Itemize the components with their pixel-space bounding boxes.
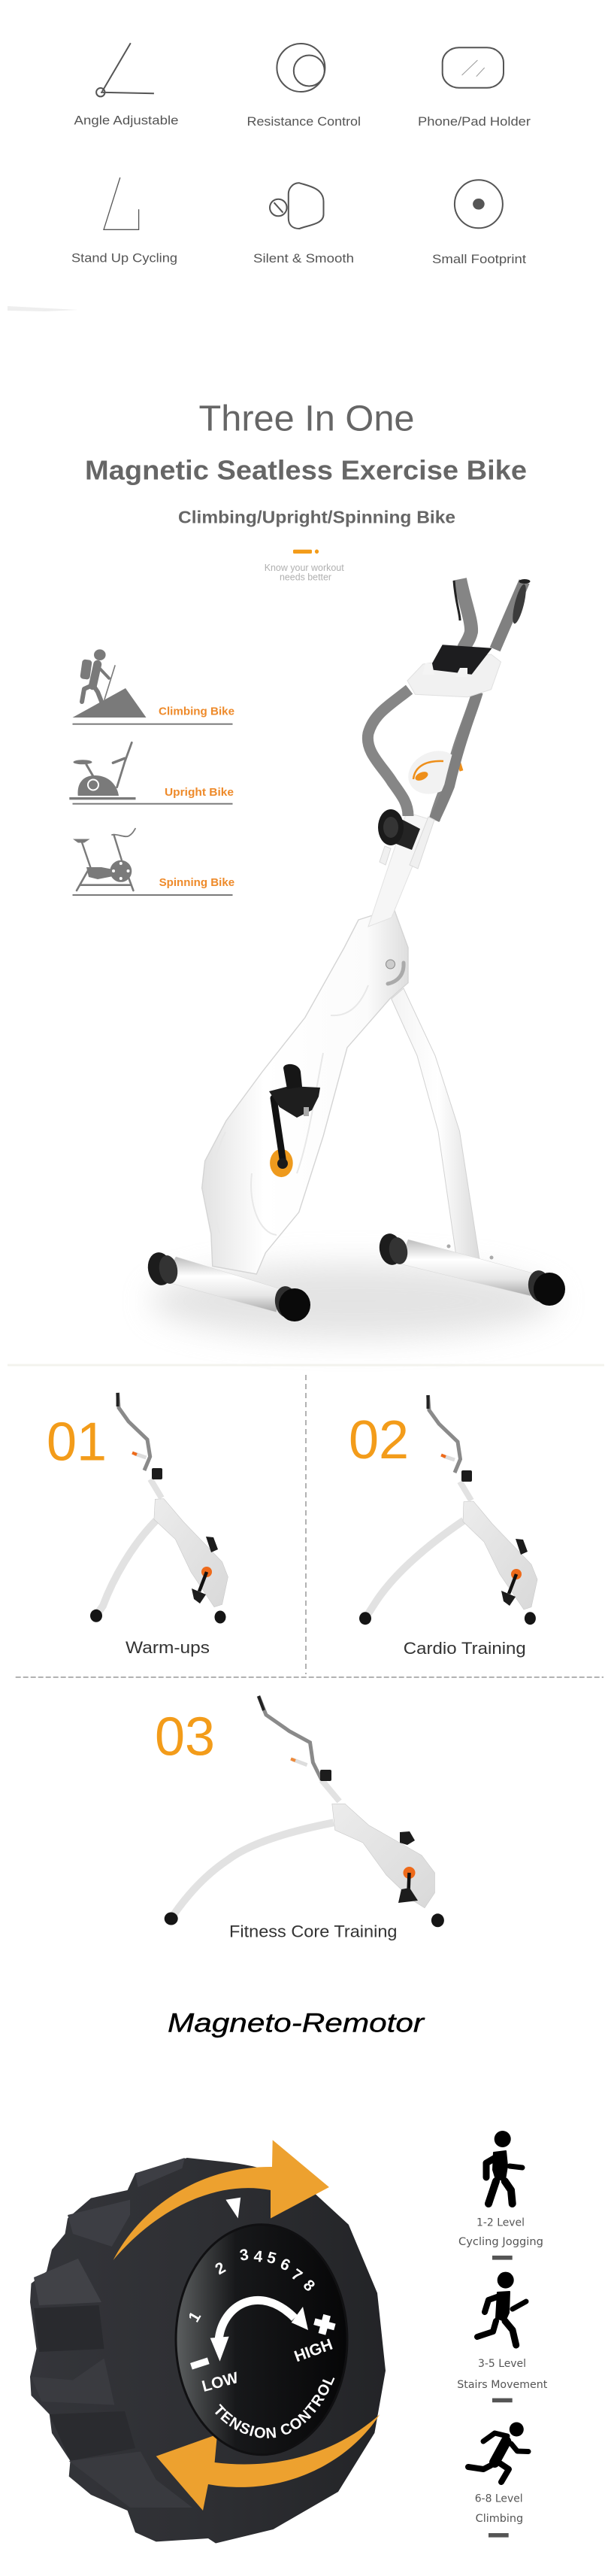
post: [368, 812, 431, 927]
level 3-5 text: 3-5 Level: [478, 2358, 526, 2370]
label tension control: TENSION CONTROL: [215, 2377, 335, 2438]
dash: [492, 2399, 513, 2402]
panel: cardio training: [349, 1395, 537, 1658]
divider: [8, 1364, 604, 1366]
right handle grip: [495, 579, 531, 649]
dial numbers: 7: [288, 2265, 305, 2285]
label: silent and smooth: Silent & Smooth: [253, 251, 354, 265]
orange arrow top: [113, 2140, 329, 2260]
illustration: main exercise bike: [145, 579, 565, 1339]
level 3-5 text: [457, 2358, 548, 2391]
label: phone holder: Phone/Pad Holder: [418, 114, 531, 129]
panel: feature icons: [71, 43, 531, 266]
pointer triangle: [225, 2198, 240, 2219]
number 01: 01: [47, 1412, 107, 1473]
icon: silent and smooth: [270, 183, 323, 229]
caption: Fitness Core Training: [229, 1922, 397, 1941]
icon: angle adjustable: [96, 43, 154, 96]
dial numbers: 5: [265, 2249, 278, 2268]
label: resistance control: Resistance Control: [247, 114, 361, 129]
left handle grip: [454, 579, 471, 648]
white double arrow: [210, 2300, 308, 2362]
icon: small footprint: [455, 180, 503, 228]
small bike mid-recline: [359, 1395, 537, 1625]
panel: tension control knob: [30, 2140, 386, 2544]
level 1-2 text: Cycling Jogging: [458, 2236, 543, 2248]
title: three in one: Three In One: [198, 399, 415, 439]
dial numbers: 6: [277, 2255, 293, 2274]
dial numbers: [185, 2246, 318, 2326]
small bike full recline: [165, 1696, 444, 1927]
left foot tube: [145, 1251, 310, 1321]
black adjustment knob: [378, 809, 420, 850]
caption: Warm-ups: [126, 1638, 210, 1657]
tagline: [265, 563, 344, 583]
icon: spinning bike: [74, 829, 135, 891]
knob flutes: [32, 2158, 192, 2508]
horizontal dashed divider: [16, 1676, 603, 1678]
icon: jogging figure: [477, 2272, 526, 2345]
dash: [489, 2533, 509, 2538]
label: small footprint: Small Footprint: [432, 252, 526, 266]
frame shell: [202, 909, 408, 1274]
label: spinning bike: Spinning Bike: [159, 876, 234, 889]
level 1-2 text: 1-2 Level: [476, 2217, 525, 2229]
dial numbers: 1: [185, 2309, 204, 2326]
pivot bolt: [386, 960, 404, 984]
white clamp: [407, 654, 501, 697]
heading: magnetic seatless exercise bike: Magnetic Seatless Exercise Bike: [85, 454, 527, 485]
panel: bike modes: [69, 649, 234, 896]
dial face: [176, 2225, 347, 2455]
orange accent: [293, 549, 319, 554]
knob body: [30, 2158, 386, 2544]
rear leg: [392, 988, 485, 1271]
front gray tube: [368, 690, 410, 816]
panel: warm-ups: [47, 1393, 228, 1657]
icon: resistance control: [277, 44, 325, 92]
dial numbers: 4: [253, 2248, 264, 2265]
label: stand up cycling: Stand Up Cycling: [71, 250, 177, 265]
phone tablet holder: [428, 645, 492, 675]
label: upright bike: Upright Bike: [165, 786, 234, 799]
orange arrow bottom: [156, 2414, 380, 2511]
vertical dashed divider: [305, 1375, 307, 1674]
number 03: 03: [155, 1707, 215, 1767]
dial numbers: 2: [212, 2259, 228, 2278]
small bike upright: [90, 1393, 228, 1623]
rule: [72, 803, 233, 805]
level 6-8 text: 6-8 Level: [475, 2493, 523, 2505]
icon: upright bike: [69, 742, 135, 800]
heading: magneto-remotor: Magneto-Remotor: [168, 2009, 425, 2038]
label: angle adjustable: Angle Adjustable: [74, 114, 179, 128]
icon: walking figure: [486, 2131, 522, 2204]
pedal and crank: [269, 1064, 320, 1177]
floor shadow: [150, 1264, 556, 1339]
number 02: 02: [349, 1410, 409, 1470]
dial numbers: 8: [300, 2277, 318, 2295]
rule: [72, 724, 233, 725]
dial numbers: 3: [239, 2246, 250, 2265]
panel: title block: [85, 399, 527, 583]
clamps on tablet: [422, 663, 467, 677]
level 1-2 text: [458, 2217, 543, 2248]
label high: HIGH: [292, 2336, 335, 2365]
caption: Cardio Training: [404, 1639, 526, 1658]
subheading: bike modes: Climbing/Upright/Spinning Bike: [178, 508, 455, 527]
level 6-8 text: [475, 2493, 523, 2525]
plus sign: [312, 2313, 337, 2337]
panel: intensity levels: [457, 2131, 548, 2538]
label: climbing bike: Climbing Bike: [159, 705, 234, 718]
tagline: Know your workout: [265, 563, 344, 573]
icon: phone holder: [443, 47, 504, 88]
dash: [492, 2256, 513, 2260]
console: [401, 743, 466, 802]
icon: climbing hiker: [72, 649, 146, 718]
level 3-5 text: Stairs Movement: [457, 2379, 548, 2391]
icon: stand up cycling: [104, 177, 139, 229]
rule: [72, 894, 233, 896]
level 6-8 text: Climbing: [476, 2513, 523, 2525]
tagline: needs better: [280, 572, 331, 583]
bracket plate: [380, 817, 434, 869]
minus sign: [190, 2358, 210, 2370]
panel: fitness core training: [155, 1696, 444, 1941]
front tube overlay: [434, 692, 477, 820]
label low: LOW: [200, 2369, 240, 2395]
rear gray tube: [434, 692, 477, 820]
icon: running figure: [468, 2422, 528, 2482]
right foot tube: [377, 1232, 565, 1306]
